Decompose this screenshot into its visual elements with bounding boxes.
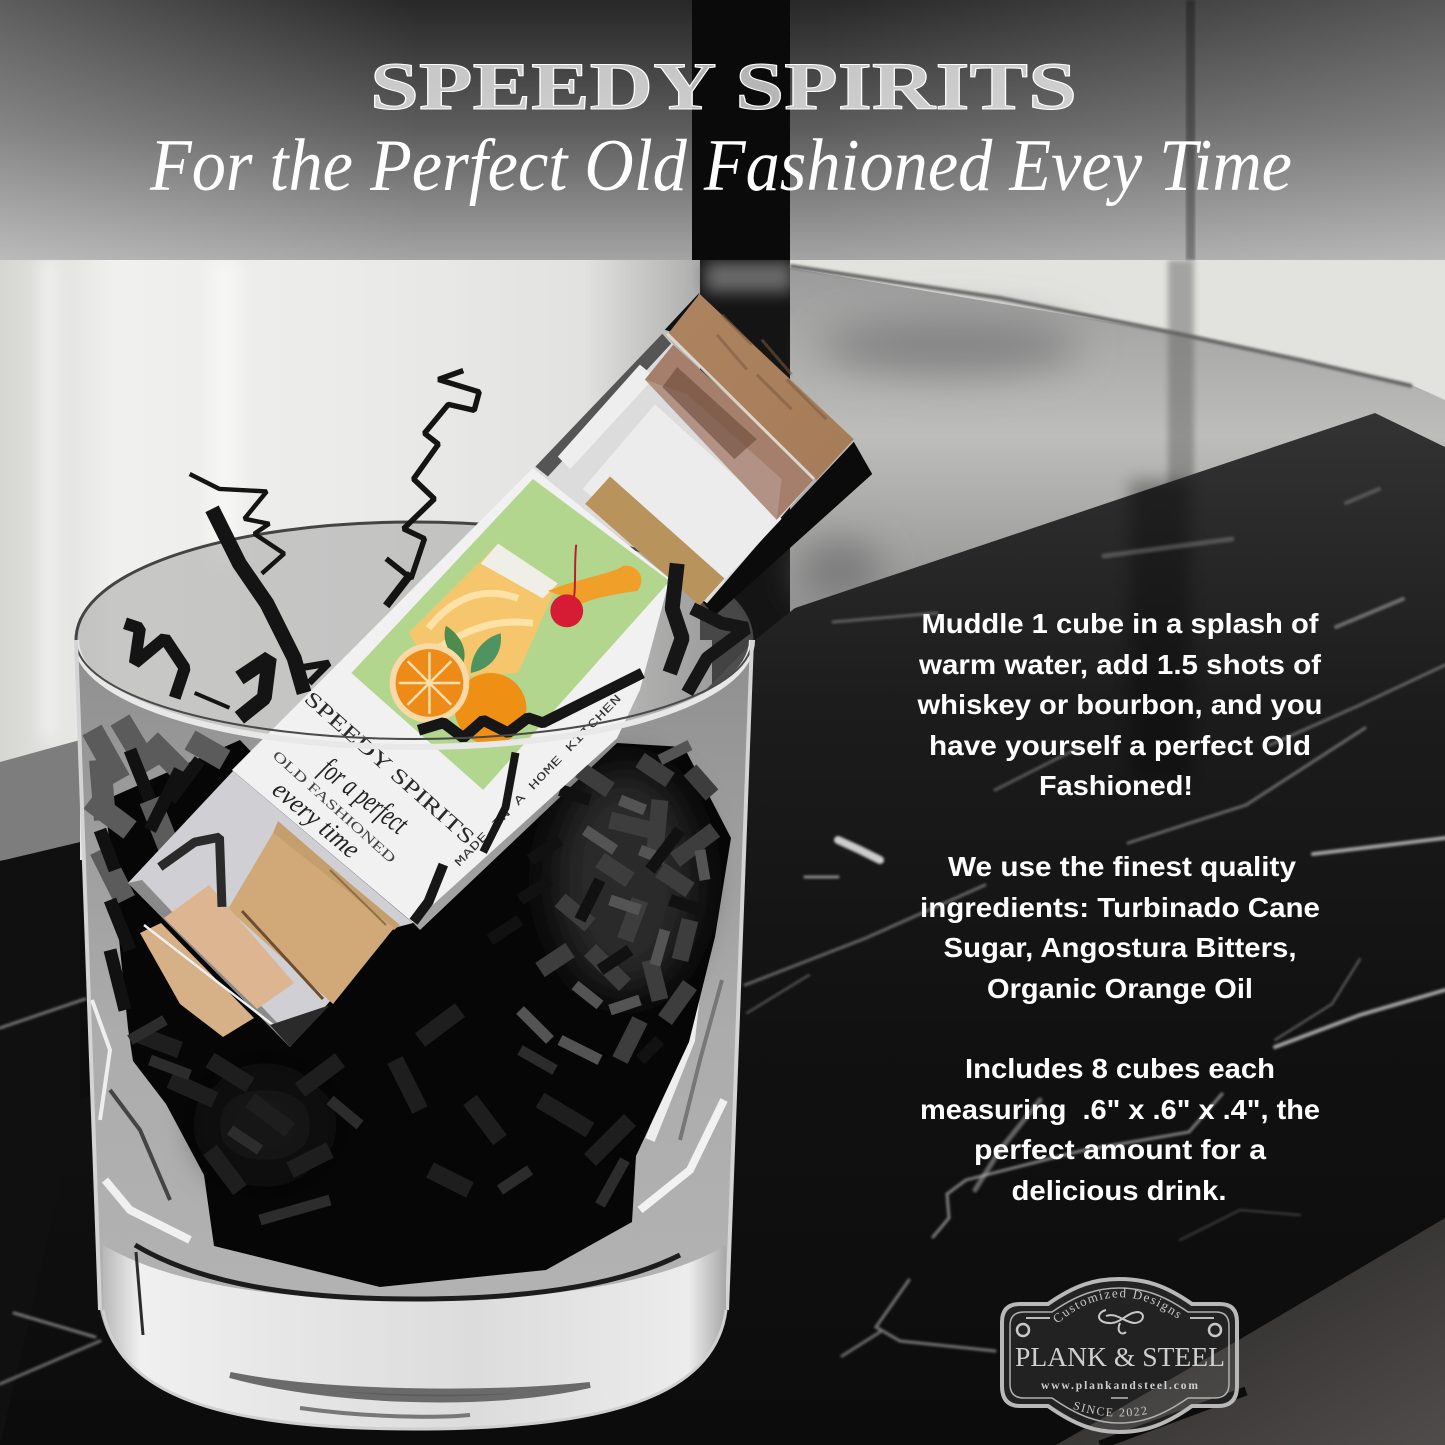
title: Speedy Spirits: SPEEDY SPIRITS: [370, 48, 1077, 124]
front shreds: [160, 564, 747, 922]
illustration: cocktail: [409, 544, 558, 678]
lower right surface: [1056, 1218, 1445, 1445]
black clip behind tube: [700, 442, 872, 616]
logo: Plank & Steel badge: PLANK & STEEL: [1015, 1342, 1225, 1372]
product: lower tube and sugar cubes: [128, 771, 413, 1047]
text block: directions and ingredients: warm water, add 1.5 shots of: [918, 649, 1322, 680]
marble veins: [0, 489, 1445, 1384]
logo: Plank & Steel badge: SINCE 2022: [1073, 1402, 1147, 1416]
subtitle script line: For the Perfect Old Fashioned Evey Time: [149, 125, 1292, 207]
glass: thick clear base: [103, 1245, 726, 1429]
title band background: [0, 0, 1445, 260]
logo: Plank & Steel badge: [1000, 1277, 1239, 1434]
label: [232, 468, 670, 923]
shredded black paper filling the glass: [90, 720, 731, 1287]
product: upper tube with cork and clip: [125, 292, 872, 718]
text block: directions and ingredients: Organic Orange Oil: [987, 973, 1253, 1004]
upper left grey shreds: [90, 720, 225, 900]
right grey paper chunks: [540, 760, 715, 1060]
counter: [0, 842, 80, 1445]
glass: front rim, walls and highlights: [76, 640, 752, 1310]
lower chunks: [140, 1010, 630, 1190]
glass: back wall and rim: [76, 522, 752, 1429]
text block: directions and ingredients: have yourself a perfect Old: [929, 730, 1311, 761]
glass neck: [533, 334, 814, 603]
text block: directions and ingredients: measuring .6" x .6" x .4", the: [920, 1094, 1320, 1125]
label text: SPEEDY SPIRITS: [300, 686, 480, 849]
product: label with cocktail illustration: [160, 468, 747, 923]
text block: directions and ingredients: delicious drink.: [1012, 1175, 1226, 1206]
back shreds above rim: [125, 371, 479, 718]
text block: directions and ingredients: perfect amount for a: [974, 1134, 1266, 1165]
product: label with cocktail illustration: for a perfect: [314, 751, 416, 841]
text block: directions and ingredients: ingredients: Turbinado Cane: [920, 892, 1320, 923]
product: label with cocktail illustration: OLD FASHIONED: [269, 748, 398, 867]
logo: Plank & Steel badge: Customized Designs: [1054, 1288, 1181, 1322]
refraction streaks on glass walls: [92, 950, 724, 1240]
wall and shelf on the right: [790, 260, 1445, 660]
upper sugar cube: [585, 477, 724, 606]
logo: Plank & Steel badge: www.plankandsteel.com: [1041, 1380, 1199, 1392]
text block: directions and ingredients: Fashioned!: [1039, 770, 1193, 801]
cork: [667, 294, 854, 480]
text block: directions and ingredients: Muddle 1 cube in a splash of: [922, 608, 1319, 639]
text block: directions and ingredients: whiskey or bourbon, and you: [916, 689, 1322, 720]
text block: directions and ingredients: We use the finest quality: [948, 851, 1296, 882]
product: label with cocktail illustration: every time: [267, 774, 366, 864]
text block: directions and ingredients: [916, 608, 1322, 1206]
product: label with cocktail illustration: MADE IN A HOME KITCHEN: [452, 692, 625, 870]
text block: directions and ingredients: Includes 8 cubes each: [965, 1053, 1275, 1084]
text block: directions and ingredients: Sugar, Angostura Bitters,: [944, 932, 1296, 963]
